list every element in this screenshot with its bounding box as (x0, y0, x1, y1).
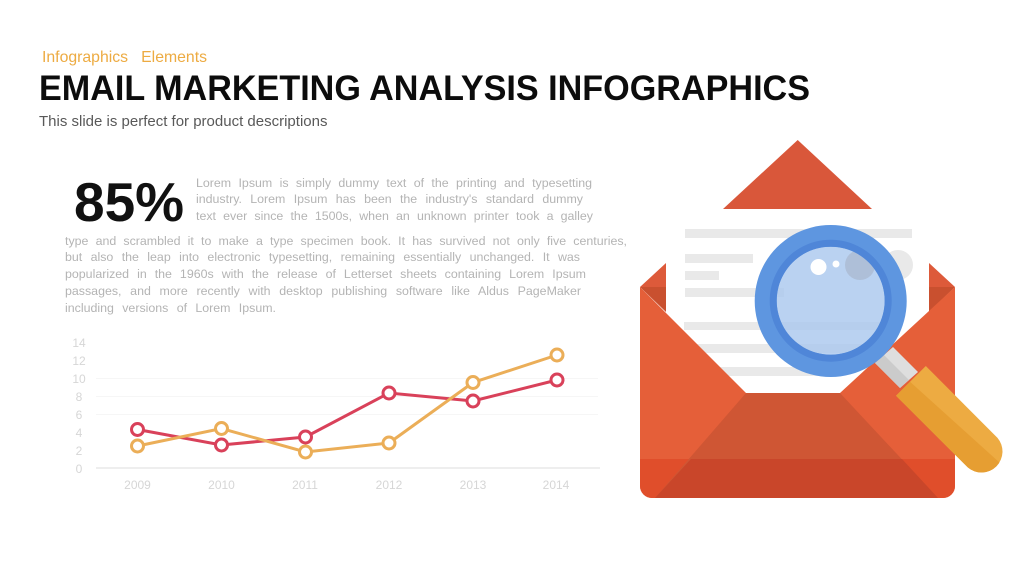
x axis labels: 2013 (460, 478, 487, 492)
big statistic 85%: 85% (74, 171, 184, 233)
x axis labels: 2012 (376, 478, 403, 492)
y axis labels: 14 (72, 336, 86, 350)
line chart (72, 336, 600, 492)
red series (132, 374, 563, 451)
envelope back corners (640, 263, 955, 312)
body text block: passages, and more recently with desktop publishing software like Aldus PageMaker (65, 284, 581, 298)
body text block: industry. Lorem Ipsum has been the industry's standard dummy (196, 192, 583, 206)
body text block: popularized in the 1960s with the release of Letterset sheets containing Lorem Ipsum (65, 267, 586, 281)
magnifier handle (896, 366, 1002, 472)
body text block: including versions of Lorem Ipsum. (65, 301, 276, 315)
title: EMAIL MARKETING ANALYSIS INFOGRAPHICS (39, 69, 810, 108)
x axis labels: 2009 (124, 478, 151, 492)
envelope and magnifier illustration (640, 140, 1002, 498)
y axis labels: 12 (72, 354, 86, 368)
magnifier metal neck (875, 347, 918, 388)
envelope bottom band (640, 459, 955, 498)
y axis labels: 2 (76, 444, 83, 458)
body text block: type and scrambled it to make a type specimen book. It has survived not only five centuries, (65, 234, 627, 248)
magnifier lens (755, 225, 907, 377)
y axis labels: 0 (76, 462, 83, 476)
y axis labels (72, 336, 86, 476)
chart axis baseline (96, 467, 600, 469)
body text block (65, 176, 627, 315)
x axis labels: 2010 (208, 478, 235, 492)
body text block: Lorem Ipsum is simply dummy text of the printing and typesetting (196, 176, 592, 190)
orange series (132, 349, 563, 458)
body text block: text ever since the 1500s, when an unknown printer took a galley (196, 209, 593, 223)
body text block: but also the leap into electronic typesetting, remaining essentially unchanged. It was (65, 250, 580, 264)
letter lines (684, 229, 913, 376)
subtitle: This slide is perfect for product descriptions (39, 113, 327, 130)
x axis labels (124, 478, 570, 492)
envelope top flap (723, 140, 872, 209)
envelope front (640, 287, 955, 498)
letter paper (666, 209, 929, 399)
y axis labels: 10 (72, 372, 86, 386)
x axis labels: 2014 (543, 478, 570, 492)
envelope centre fold shadow (655, 459, 938, 498)
x axis labels: 2011 (292, 478, 318, 492)
y axis labels: 4 (76, 426, 83, 440)
y axis labels: 8 (76, 390, 83, 404)
eyebrow label: Infographics Elements (42, 49, 207, 66)
y axis labels: 6 (76, 408, 83, 422)
envelope centre fold (655, 393, 938, 498)
